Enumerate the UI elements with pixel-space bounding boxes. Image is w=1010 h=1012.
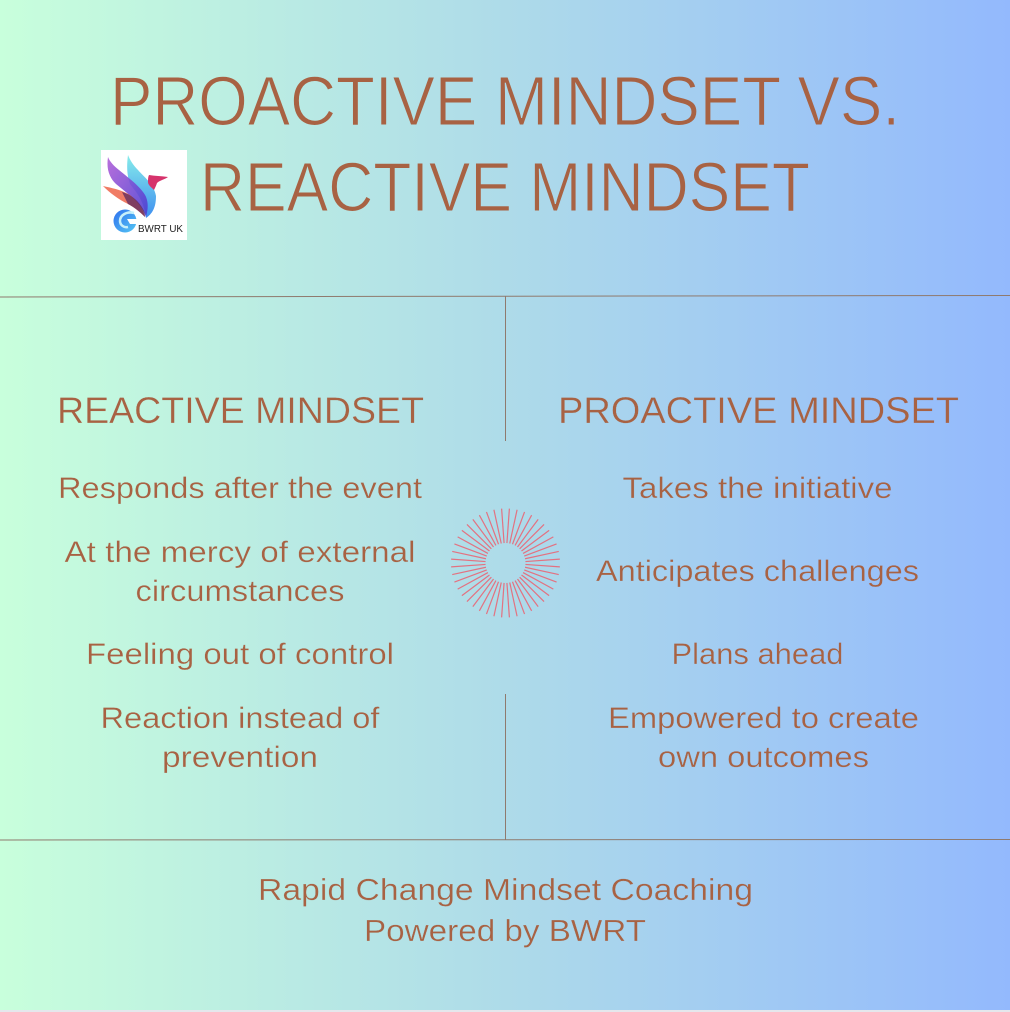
proactive mindset list: Plans ahead <box>672 638 844 671</box>
footer text: Powered by BWRT <box>364 913 646 948</box>
heading: proactive mindset: PROACTIVE MINDSET <box>558 389 959 431</box>
reactive mindset list: Reaction instead of <box>100 702 380 735</box>
reactive mindset list: At the mercy of external <box>64 536 416 569</box>
reactive mindset list <box>58 472 423 774</box>
footer text <box>258 872 753 948</box>
proactive mindset list <box>596 472 919 774</box>
icon: sunburst <box>451 509 560 617</box>
divider lines <box>0 296 1010 840</box>
proactive mindset list: own outcomes <box>658 741 869 774</box>
footer text: Rapid Change Mindset Coaching <box>258 872 753 907</box>
title: REACTIVE MINDSET <box>200 148 810 226</box>
reactive mindset list: Responds after the event <box>58 472 423 505</box>
proactive mindset list: Anticipates challenges <box>596 555 919 588</box>
reactive mindset list: prevention <box>162 741 318 774</box>
reactive mindset list: circumstances <box>136 575 344 608</box>
reactive mindset list: Feeling out of control <box>86 638 394 671</box>
title <box>110 62 900 226</box>
icon: BWRT UK logo: BWRT UK <box>138 224 183 235</box>
proactive mindset list: Empowered to create <box>608 702 919 735</box>
proactive mindset list: Takes the initiative <box>622 472 892 505</box>
heading: reactive mindset: REACTIVE MINDSET <box>57 389 424 431</box>
icon: BWRT UK logo <box>101 150 187 240</box>
title: PROACTIVE MINDSET VS. <box>110 62 900 140</box>
